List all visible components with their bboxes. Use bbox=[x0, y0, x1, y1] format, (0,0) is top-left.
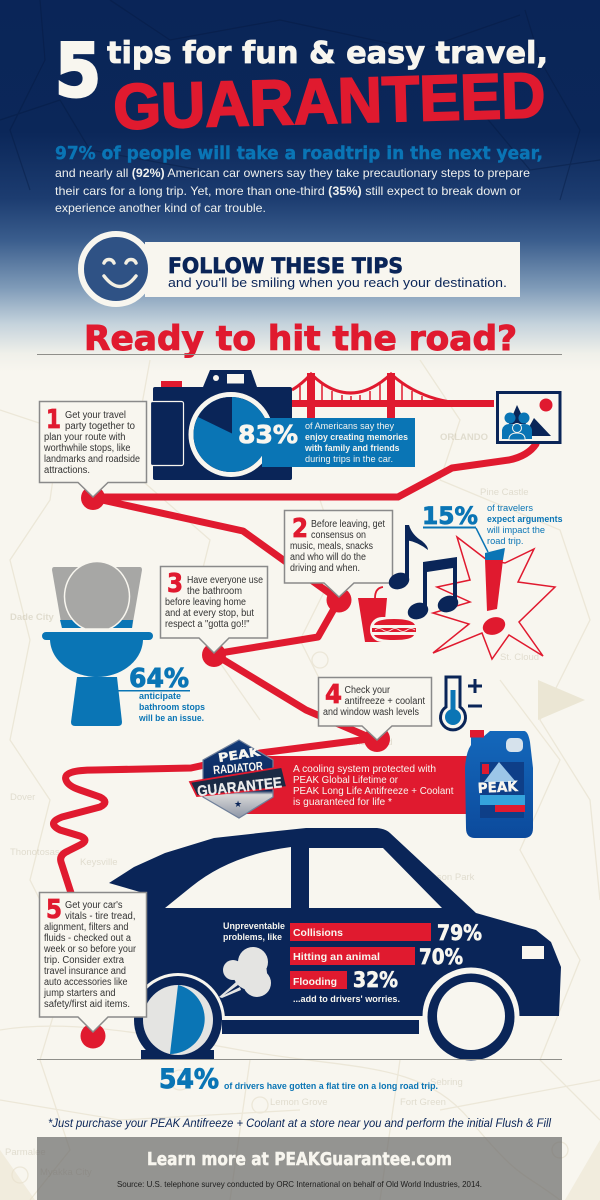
stat: 83 percent: with family and friends bbox=[304, 443, 400, 454]
icon: toilet bbox=[42, 561, 153, 726]
callout: tip 1: party together to bbox=[65, 421, 135, 432]
stat: 83 percent: 83% bbox=[238, 420, 298, 449]
callout: tip 3: 3 bbox=[167, 569, 183, 599]
banner subheading: and you'll be smiling when you reach your destination. bbox=[168, 275, 507, 290]
callout: tip 2: consensus on bbox=[311, 530, 366, 541]
background with map: Lemon Grove bbox=[270, 1097, 328, 1108]
panel: radiator guarantee: is guaranteed for life * bbox=[293, 796, 392, 808]
stat: 64 percent: 64% bbox=[129, 664, 189, 694]
background with map: ORLANDO bbox=[440, 432, 488, 443]
background with map: St. Cloud bbox=[500, 652, 539, 663]
footer link text: Learn more at PEAKGuarantee.com bbox=[147, 1149, 452, 1170]
intro body bbox=[55, 166, 530, 215]
callout: tip 3: Have everyone use bbox=[187, 575, 263, 586]
stat: 54 percent: of drivers have gotten a flat tire on a long road trip. bbox=[224, 1081, 438, 1092]
callout: tip 5 bbox=[40, 892, 146, 1032]
stat: 15 percent: of travelers bbox=[487, 503, 533, 514]
stat: 54 percent: 54% bbox=[159, 1064, 219, 1095]
intro body: and nearly all (92%) American car owners say they take precautionary steps to prepare bbox=[55, 166, 530, 180]
windows bbox=[165, 847, 442, 908]
callout: tip 2: and who will do the bbox=[290, 552, 366, 563]
exhaust cloud bbox=[219, 947, 271, 998]
icon: thermometer bbox=[440, 677, 482, 730]
callout: tip 1: 1 bbox=[46, 405, 61, 435]
icon: antifreeze jug: PEAK bbox=[477, 779, 519, 797]
icon: antifreeze jug bbox=[465, 730, 533, 838]
follow these tips banner bbox=[81, 234, 520, 304]
guaranteed: GUARANTEED bbox=[112, 59, 546, 143]
background with map: Babson Park bbox=[420, 872, 475, 883]
car stats: 79% bbox=[437, 921, 482, 945]
icon: peak radiator guarantee badge: RADIATOR bbox=[212, 759, 264, 777]
callout: tip 4: and window wash levels bbox=[323, 707, 419, 718]
callout: tip 1: plan your route with bbox=[44, 432, 126, 443]
callout: tip 1 bbox=[40, 402, 146, 497]
heading: ready to hit the road: Ready to hit the road? bbox=[84, 319, 517, 359]
callout: tip 5: vitals - tire tread, bbox=[65, 911, 136, 922]
callout: tip 2 bbox=[284, 510, 392, 597]
background with map: Myakka City bbox=[40, 1167, 92, 1178]
car stats: 70% bbox=[419, 945, 463, 969]
sill bar bbox=[222, 1020, 419, 1034]
callout: tip 1: attractions. bbox=[44, 465, 90, 476]
icon: peak radiator guarantee badge: GUARANTEE bbox=[196, 774, 283, 800]
footer band bbox=[37, 1137, 562, 1200]
panel: radiator guarantee bbox=[245, 756, 467, 814]
panel: radiator guarantee: PEAK Global Lifetime or bbox=[293, 774, 398, 786]
source line: Source: U.S. telephone survey conducted by ORC International on behalf of Old World Industries, 2014. bbox=[117, 1179, 482, 1189]
background with map: Parmalee bbox=[5, 1147, 46, 1158]
callout: tip 4: 4 bbox=[325, 680, 342, 710]
car stats: Flooding bbox=[293, 976, 337, 988]
car stats: ...add to drivers' worries. bbox=[293, 994, 400, 1005]
stat: 15 percent: expect arguments bbox=[487, 514, 562, 525]
callout: tip 2: 2 bbox=[292, 514, 308, 544]
callout: tip 5: jump starters and bbox=[43, 988, 116, 999]
icon: smiley face bbox=[81, 234, 151, 304]
callout: tip 3 bbox=[160, 566, 268, 653]
intro body: their cars for a long trip. Yet, more than one-third (35%) still expect to break down or bbox=[55, 184, 521, 198]
icon: camera bbox=[150, 370, 292, 480]
callout: tip 4: Check your bbox=[344, 685, 391, 696]
stat: 83 percent: during trips in the car. bbox=[305, 454, 393, 465]
callout: tip 5: alignment, filters and bbox=[44, 922, 128, 933]
callout: tip 1: Get your travel bbox=[65, 410, 126, 421]
callout: tip 5: safety/first aid items. bbox=[44, 999, 130, 1010]
callout: tip 5: 5 bbox=[46, 895, 62, 925]
background with map: Fort Green bbox=[400, 1097, 446, 1108]
car stats: Hitting an animal bbox=[293, 951, 380, 963]
stat: 64 percent: will be an issue. bbox=[138, 713, 204, 724]
background with map: Thonotosassa bbox=[10, 847, 70, 858]
callout: tip 2: Before leaving, get bbox=[311, 519, 385, 530]
car stats: Collisions bbox=[293, 927, 343, 939]
stat: 83 percent: of Americans say they bbox=[305, 421, 394, 432]
callout: tip 2: music, meals, snacks bbox=[290, 541, 373, 552]
stat: 64 percent bbox=[115, 664, 205, 724]
banner heading: FOLLOW THESE TIPS bbox=[168, 254, 403, 278]
icon: music notes bbox=[386, 525, 461, 622]
stat: 15 percent bbox=[422, 502, 562, 552]
front wheel bbox=[422, 968, 520, 1060]
background with map: Pine Castle bbox=[480, 487, 529, 498]
big number five: 5 bbox=[55, 29, 101, 114]
icon: exclamation burst bbox=[433, 537, 555, 659]
background with map: Keysville bbox=[80, 857, 118, 868]
headlight bbox=[522, 946, 544, 959]
icon: golden gate bridge bbox=[290, 373, 494, 418]
background with map: Lake Alfred bbox=[345, 737, 393, 748]
stat: 15 percent: road trip. bbox=[487, 536, 524, 547]
callout: tip 5: Get your car's bbox=[65, 900, 122, 911]
title bbox=[55, 29, 548, 143]
callout: tip 5: trip. Consider extra bbox=[44, 955, 124, 966]
icon: drink and hot dog bbox=[358, 587, 418, 642]
callout: tip 3: before leaving home bbox=[165, 597, 246, 608]
panel: radiator guarantee: PEAK Long Life Antifreeze + Coolant bbox=[293, 785, 454, 797]
car stats: problems, like bbox=[223, 932, 282, 943]
callout: tip 3: and at every stop, but bbox=[165, 608, 254, 619]
car bbox=[109, 828, 561, 1067]
stat: 83 percent bbox=[238, 418, 415, 467]
callout: tip 3: the bathroom bbox=[187, 586, 242, 597]
intro text block bbox=[55, 143, 543, 215]
icon: peak radiator guarantee badge: ★ bbox=[234, 799, 242, 809]
car stats: 32% bbox=[353, 968, 398, 992]
footnote: *Just purchase your PEAK Antifreeze + Coolant at a store near you and perform the initial Flush & Fill bbox=[48, 1116, 551, 1130]
icon: peak radiator guarantee badge: PEAK bbox=[217, 745, 262, 765]
background with map: Dade City bbox=[10, 612, 55, 623]
icon: peak radiator guarantee badge bbox=[190, 740, 287, 818]
background with map: Dover bbox=[10, 792, 35, 803]
car stats bbox=[223, 921, 482, 1005]
stat: 64 percent: anticipate bbox=[139, 691, 181, 702]
panel: radiator guarantee: A cooling system protected with bbox=[293, 763, 436, 775]
stat: 83 percent: enjoy creating memories bbox=[305, 432, 408, 443]
callout: tip 1: worthwhile stops, like bbox=[43, 443, 131, 454]
stat: 15 percent: will impact the bbox=[486, 525, 545, 536]
rear wheel with pie chart bbox=[134, 973, 225, 1059]
callout: tip 5: week or so before your bbox=[43, 944, 137, 955]
stat: 15 percent: 15% bbox=[422, 502, 478, 530]
intro headline: 97% of people will take a roadtrip in the next year, bbox=[55, 143, 543, 164]
callout: tip 5: auto accessories like bbox=[44, 977, 128, 988]
intro body: experience another kind of car trouble. bbox=[55, 201, 266, 215]
callout: tip 5: fluids - checked out a bbox=[44, 933, 131, 944]
road route bbox=[53, 444, 536, 1048]
callout: tip 5: travel insurance and bbox=[44, 966, 126, 977]
callout: tip 3: respect a "gotta go!!" bbox=[165, 619, 250, 630]
callout: tip 1: landmarks and roadside bbox=[44, 454, 140, 465]
callout: tip 4 bbox=[318, 678, 432, 740]
callout: tip 2: driving and when. bbox=[290, 563, 360, 574]
background with map: Sebring bbox=[430, 1077, 463, 1088]
car stats: Unpreventable bbox=[223, 921, 285, 932]
stat: 64 percent: bathroom stops bbox=[139, 702, 205, 713]
icon: picture frame with family bbox=[498, 392, 560, 442]
stat: 54 percent bbox=[159, 1064, 438, 1095]
title line one: tips for fun & easy travel, bbox=[107, 36, 548, 71]
callout: tip 4: antifreeze + coolant bbox=[344, 696, 425, 707]
